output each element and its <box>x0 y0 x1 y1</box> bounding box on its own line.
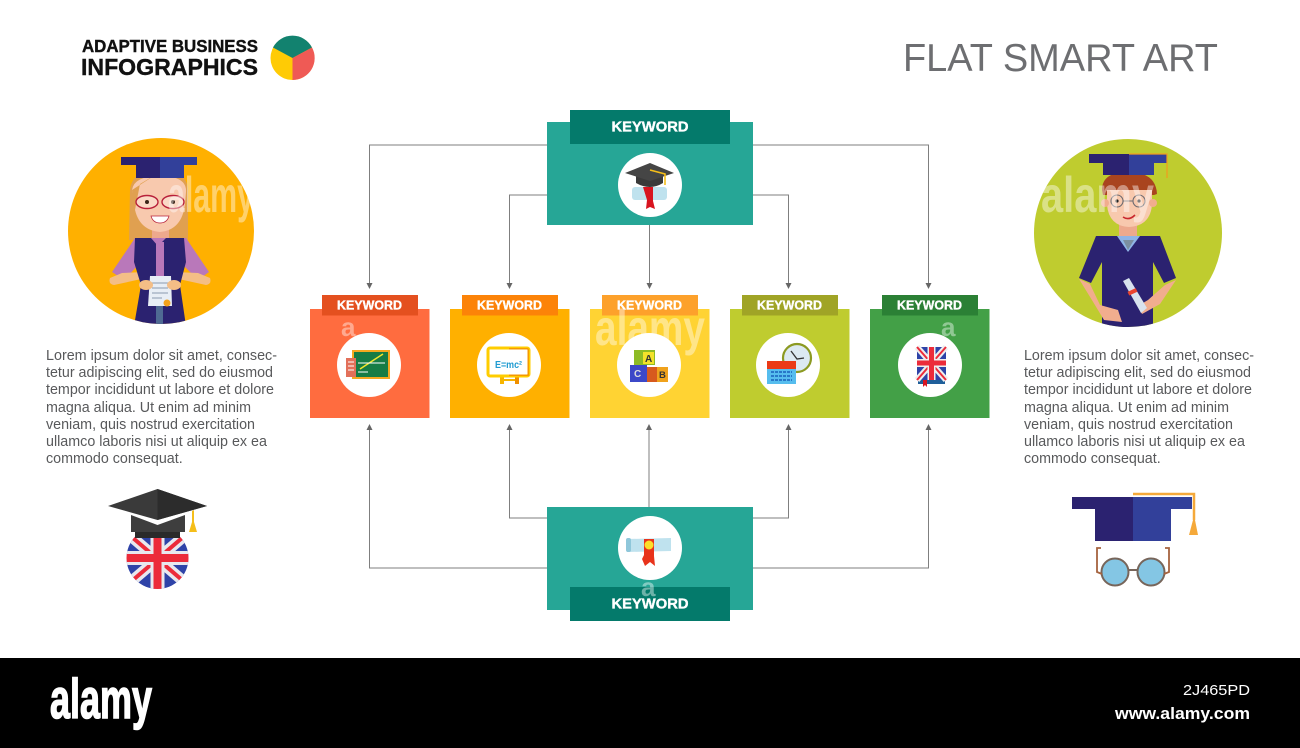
panel: orange keyword card <box>310 295 430 418</box>
panel: green keyword card <box>870 295 990 418</box>
header: top keyword: KEYWORD <box>612 120 688 136</box>
image id: 2J465PD <box>1183 682 1250 699</box>
watermark: alamy <box>1041 167 1154 223</box>
panel: amber keyword card <box>450 295 570 418</box>
text block: left <box>46 348 277 467</box>
icon: UK flag book <box>917 347 946 387</box>
text block: left: ullamco laboris nisi ut aliquip ex ea <box>46 434 267 450</box>
connectors from top box <box>366 145 932 289</box>
header: bottom keyword <box>570 587 730 621</box>
text block: right: veniam, quis nostrud exercitation <box>1024 417 1233 433</box>
icon: alphabet blocks: C <box>634 369 641 380</box>
icon: clock and calendar <box>767 344 811 384</box>
header: green keyword: KEYWORD <box>897 298 962 312</box>
text block: right: magna aliqua. Ut enim ad minim <box>1024 400 1229 416</box>
website: www.alamy.com <box>1114 705 1250 723</box>
footer logo: alamy <box>50 667 152 730</box>
connectors from bottom box <box>366 424 932 568</box>
header: lime keyword: KEYWORD <box>757 298 822 312</box>
icon: formula board: E=mc² <box>495 360 523 371</box>
icon: cap over UK flag circle <box>108 489 207 590</box>
icon: blackboard <box>346 350 390 379</box>
text block: right <box>1024 348 1254 467</box>
header: amber keyword: KEYWORD <box>477 298 542 312</box>
text block: left: Lorem ipsum dolor sit amet, consec- <box>46 348 277 364</box>
watermark <box>168 167 1154 602</box>
footer bar <box>0 658 1300 748</box>
watermark: a <box>641 572 656 602</box>
watermark: a <box>341 312 356 342</box>
watermark: alamy <box>595 300 705 356</box>
panel: man graduate portrait <box>1034 139 1222 330</box>
watermark: a <box>941 312 956 342</box>
panel: yellow keyword card <box>590 295 710 418</box>
header: orange keyword: KEYWORD <box>337 298 402 312</box>
text block: left: veniam, quis nostrud exercitation <box>46 417 255 433</box>
text block: left: tempor incididunt ut labore et dolore <box>46 382 274 398</box>
header: yellow keyword: KEYWORD <box>617 298 682 312</box>
logo heading: ADAPTIVE BUSINESS <box>82 36 258 56</box>
header: bottom keyword: KEYWORD <box>612 596 688 612</box>
watermark: alamy <box>168 167 254 223</box>
title: FLAT SMART ART <box>903 37 1218 80</box>
text block: right: commodo consequat. <box>1024 451 1161 467</box>
text block: left: tetur adipiscing elit, sed do eiusmod <box>46 365 273 381</box>
text block: left: magna aliqua. Ut enim ad minim <box>46 400 251 416</box>
panel: lime keyword card <box>730 295 850 418</box>
icon: alphabet blocks: B <box>659 370 666 381</box>
panel: top keyword box <box>547 110 753 225</box>
text block: right: tetur adipiscing elit, sed do eiusmod <box>1024 365 1251 381</box>
panel: bottom keyword box <box>547 507 753 621</box>
icon: cap and diploma <box>625 163 674 209</box>
panel: woman graduate portrait <box>68 138 254 326</box>
icon: diploma with ribbon <box>626 538 671 566</box>
icon: logo pie <box>270 36 315 80</box>
text block: right: tempor incididunt ut labore et dolore <box>1024 382 1252 398</box>
icon: alphabet blocks: A <box>645 354 652 365</box>
text block: right: ullamco laboris nisi ut aliquip ex ea <box>1024 434 1245 450</box>
logo heading: INFOGRAPHICS <box>81 54 258 80</box>
logo heading <box>81 36 258 80</box>
icon: alphabet blocks <box>630 350 668 382</box>
text block: left: commodo consequat. <box>46 451 183 467</box>
text block: right: Lorem ipsum dolor sit amet, consec- <box>1024 348 1254 364</box>
icon: cap over glasses <box>1072 494 1198 586</box>
header: top keyword <box>570 110 730 144</box>
